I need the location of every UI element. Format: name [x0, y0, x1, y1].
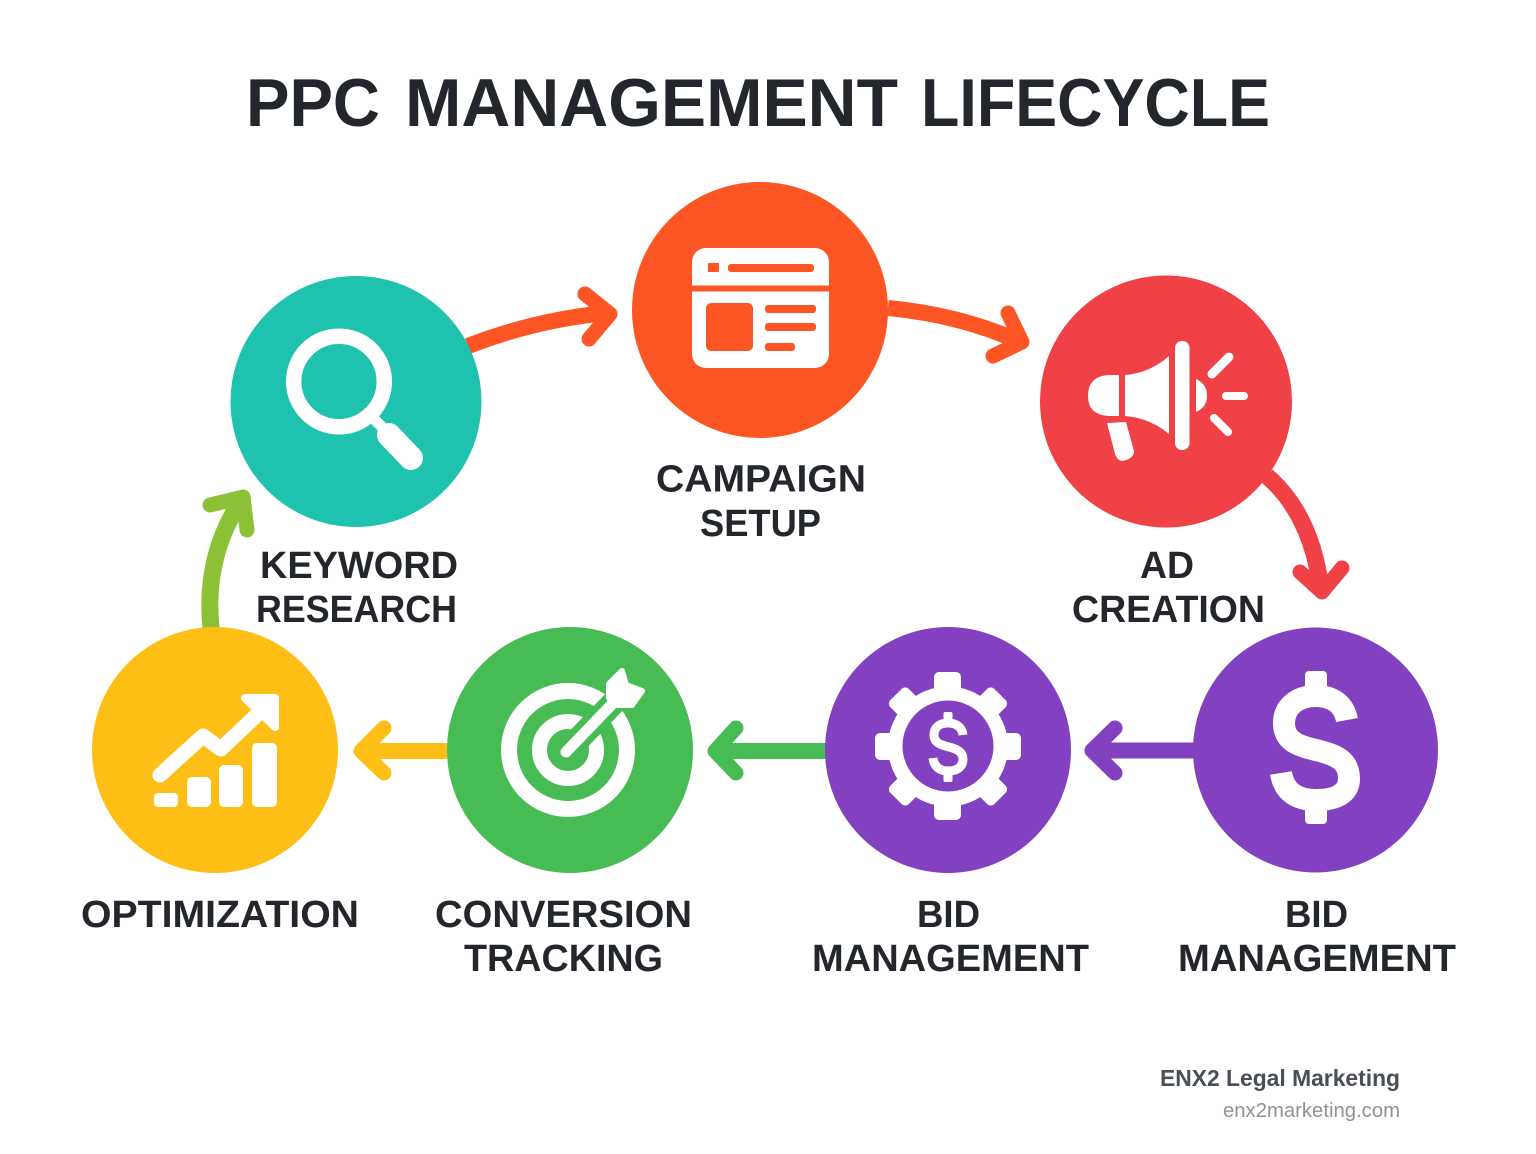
title: MANAGEMENT	[405, 66, 898, 141]
arrow: campaign setup to ad creation	[888, 308, 1022, 356]
icon: dollar sign	[1281, 671, 1349, 824]
icon: growth chart	[154, 698, 277, 807]
step: optimization	[92, 627, 338, 873]
label: bid management (gear): MANAGEMENT	[812, 938, 1089, 980]
circle	[92, 627, 338, 873]
circle	[632, 182, 888, 438]
icon: target with arrow	[509, 671, 642, 809]
icon: megaphone	[1088, 341, 1244, 461]
step: campaign setup	[632, 182, 888, 438]
step: ad creation	[1040, 276, 1292, 528]
label: bid management (dollar): MANAGEMENT	[1178, 938, 1456, 980]
arrow: optimization to keyword research	[210, 497, 247, 628]
label: bid management (gear)	[812, 894, 1089, 980]
icon: browser window	[692, 248, 829, 368]
labels	[81, 458, 1456, 980]
step: bid management (dollar)	[1193, 628, 1438, 872]
title: PPC	[246, 66, 380, 141]
label: keyword research: RESEARCH	[256, 589, 457, 631]
icon: gear with dollar	[875, 672, 1021, 820]
label: optimization: OPTIMIZATION	[81, 894, 359, 936]
circle	[825, 627, 1071, 873]
footer credit	[1160, 1065, 1400, 1122]
step: bid management (gear)	[825, 627, 1071, 873]
arrow: keyword research to campaign setup	[468, 294, 610, 346]
title	[246, 66, 1270, 141]
label: keyword research	[256, 545, 458, 631]
circle	[447, 627, 693, 873]
circle	[230, 276, 482, 527]
arrow: bid management to bid management	[1092, 728, 1194, 773]
label: ad creation: CREATION	[1072, 589, 1265, 631]
label: bid management (gear): BID	[917, 894, 980, 936]
label: campaign setup	[656, 458, 866, 545]
label: keyword research: KEYWORD	[260, 545, 458, 587]
label: campaign setup: CAMPAIGN	[656, 458, 866, 500]
label: bid management (dollar): BID	[1285, 894, 1348, 936]
label: conversion tracking: CONVERSION	[435, 894, 692, 936]
arrow: bid management to conversion tracking	[715, 728, 826, 773]
footer credit: enx2marketing.com	[1223, 1100, 1400, 1122]
label: conversion tracking	[435, 894, 692, 980]
label: campaign setup: SETUP	[700, 503, 821, 545]
label: bid management (dollar)	[1178, 894, 1456, 980]
step: conversion tracking	[447, 627, 693, 873]
arrow: ad creation to bid management	[1267, 476, 1342, 592]
label: conversion tracking: TRACKING	[464, 938, 663, 980]
label: ad creation	[1072, 545, 1265, 631]
label: ad creation: AD	[1140, 545, 1194, 587]
step: keyword research	[230, 276, 482, 527]
circle	[1040, 276, 1292, 528]
footer credit: ENX2 Legal Marketing	[1160, 1065, 1400, 1091]
title: LIFECYCLE	[921, 66, 1270, 141]
arrow: conversion tracking to optimization	[361, 728, 447, 773]
icon: magnifying glass	[294, 336, 411, 458]
circle	[1193, 628, 1438, 872]
